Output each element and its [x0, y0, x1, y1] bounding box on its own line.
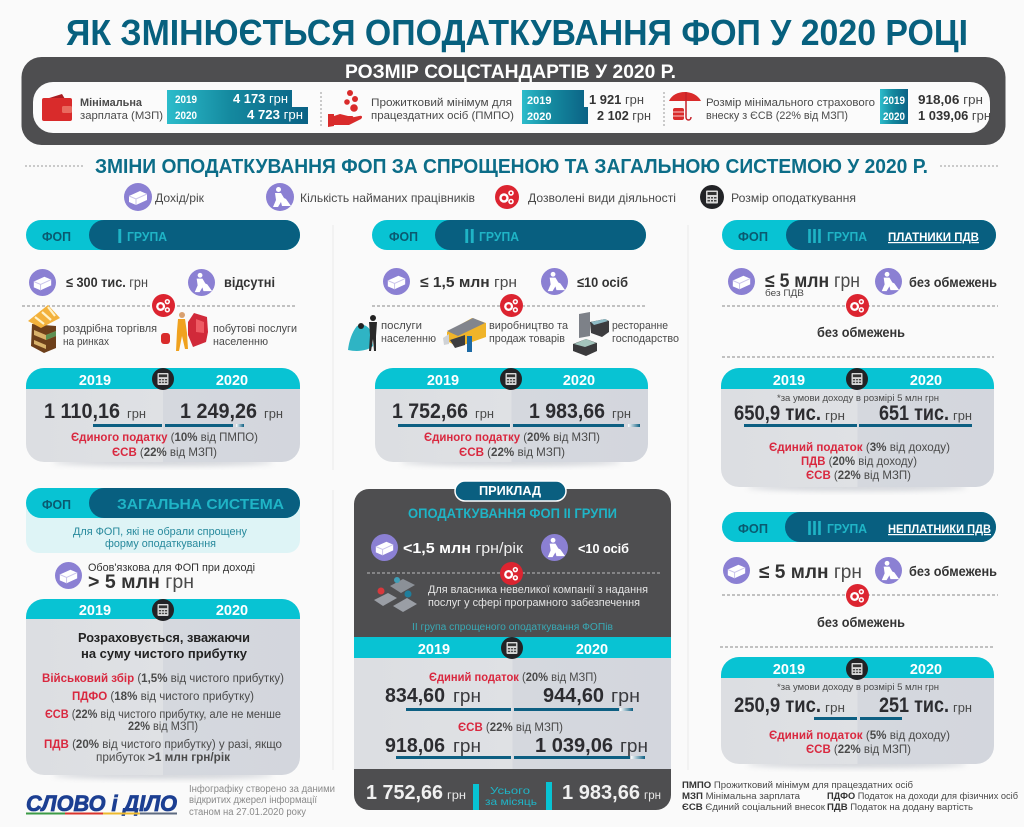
group II pill: ГРУПА	[479, 229, 520, 244]
general system pill	[26, 488, 300, 553]
source note	[189, 783, 335, 818]
source note: станом на 27.01.2020 року	[189, 807, 306, 818]
monthly total: грн	[644, 788, 661, 802]
income limit: ≤ 300 тис. грн	[66, 274, 148, 290]
tax panel: general system: 2020	[216, 603, 248, 619]
icon: activities	[500, 562, 523, 585]
income limit: ≤ 5 млн грн	[759, 562, 862, 583]
production text	[489, 320, 569, 345]
group III non-VAT payers pill: ФОП	[738, 521, 768, 536]
tax panel: general system: ПДФО (18% від чистого прибутку)	[72, 691, 254, 703]
icon: factory	[443, 318, 486, 352]
hairdresser text: населенню	[381, 333, 436, 345]
minimum wage label: зарплата (МЗП)	[80, 110, 163, 122]
icon: income	[124, 183, 152, 211]
tax panel: group III VAT payers: 650,9 тис.	[734, 402, 821, 425]
monthly total: за місяць	[485, 796, 538, 808]
insurance contribution label: Розмір мінімального страхового	[706, 97, 875, 109]
example description: послуг у сфері програмного забезпечення	[428, 597, 640, 609]
column: general system	[26, 488, 300, 779]
group III VAT payers pill: ГРУПА	[827, 229, 868, 244]
example tax body: грн	[453, 736, 481, 756]
tax panel: group III VAT payers: 651 тис.	[879, 402, 949, 425]
employees limit	[541, 534, 629, 561]
tax panel: group III VAT payers: 2019	[773, 373, 805, 389]
tax panel: general system: Військовий збір (1,5% від чистого прибутку)	[42, 673, 284, 685]
column: group II	[348, 220, 679, 466]
employees limit: ≤10 осіб	[577, 274, 628, 290]
general system description: Для ФОП, які не обрали спрощену	[73, 526, 247, 538]
example tax body: грн	[620, 736, 648, 756]
tax panel: group I: 1 249,26	[180, 400, 257, 423]
permitted activities text: без обмежень	[817, 615, 905, 630]
services text	[213, 323, 297, 348]
services text: побутові послуги	[213, 323, 297, 335]
hairdresser text	[381, 320, 436, 345]
tax panel: general system: ПДВ (20% від чистого прибутку) у разі, якщо	[44, 739, 282, 751]
tax panel: general system: ЄСВ (22% від чистого прибутку, але не менше	[45, 709, 281, 721]
tax panel: general system: 22% від МЗП)	[128, 721, 198, 733]
tax panel: group II: 1 752,66	[392, 400, 468, 423]
example tax body: 918,06	[385, 735, 445, 757]
tax panel: group III non-VAT payers: грн	[953, 700, 972, 715]
group II pill: ФОП	[389, 229, 418, 244]
icon: activities	[846, 294, 869, 317]
tax panel: group III non-VAT payers: ЄСВ (22% від МЗП)	[806, 742, 911, 756]
insurance contribution values: 1 039,06 грн	[918, 108, 991, 123]
icon: activities	[500, 294, 523, 317]
insurance contribution values	[880, 89, 991, 124]
tax panel: group III non-VAT payers: 2019	[773, 662, 805, 678]
logo: СЛОВО і ДІЛО	[26, 791, 177, 816]
tax panel: group III non-VAT payers	[721, 657, 994, 768]
example description	[428, 584, 648, 609]
example heading: ОПОДАТКУВАННЯ ФОП II ГРУПИ	[408, 506, 617, 521]
column: group III non-VAT payers	[720, 512, 998, 768]
tax panel: group I: 1 110,16	[44, 400, 120, 423]
subsistence minimum label: Прожитковий мінімум для	[371, 97, 512, 109]
tax panel: group III VAT payers	[721, 368, 994, 491]
general system pill: ФОП	[42, 497, 71, 512]
insurance contribution values: 918,06 грн	[918, 92, 983, 107]
example description: Для власника невеликої компанії з надання	[428, 584, 648, 596]
icon: permitted activities	[495, 185, 519, 209]
icon: coins in hand	[328, 90, 362, 127]
group III VAT payers pill: ПЛАТНИКИ ПДВ	[888, 230, 979, 244]
minimum wage values: 4 723 грн	[247, 107, 303, 122]
abbreviations legend	[682, 780, 1019, 813]
tax panel: group III VAT payers: ПДВ (20% від доходу)	[801, 454, 917, 468]
legend: Розмір оподаткування	[731, 191, 856, 205]
tax panel: general system: Розраховується, зважаючи	[78, 630, 250, 645]
insurance contribution values: 2019	[883, 95, 905, 107]
example tax body: 2019	[418, 642, 450, 658]
icon: activities	[152, 294, 175, 317]
restaurant text: господарство	[612, 333, 679, 345]
abbreviations legend: ПДФО Податок на доходи для фізичних осіб	[827, 791, 1019, 802]
example tax body: ЄСВ (22% від МЗП)	[458, 722, 563, 734]
group I pill: ГРУПА	[127, 229, 168, 244]
example tax body: Єдиний податок (20% від МЗП)	[429, 672, 597, 684]
group III non-VAT payers pill: НЕПЛАТНИКИ ПДВ	[888, 522, 991, 536]
group III non-VAT payers pill: III	[807, 518, 822, 540]
tax panel: group III non-VAT payers: Єдиний податок (5% від доходу)	[769, 728, 950, 742]
icon: workers	[266, 183, 294, 211]
tax panel: general system: на суму чистого прибутку	[81, 646, 248, 661]
group III non-VAT payers pill	[722, 512, 996, 542]
source note: Інфографіку створено за даними	[189, 783, 335, 795]
legend: Дозволені види діяльності	[528, 191, 676, 205]
tax panel: group I: 2020	[216, 373, 248, 389]
tax panel: group I	[26, 368, 300, 466]
column: group I	[22, 220, 300, 466]
group III VAT payers pill: III	[807, 226, 822, 248]
employees limit: відсутні	[224, 274, 275, 290]
tax panel: group III non-VAT payers: 250,9 тис.	[734, 694, 821, 717]
insurance contribution values: 2020	[883, 111, 905, 123]
tax panel: general system: прибуток >1 млн грн/рік	[96, 752, 230, 764]
mandatory income threshold: Обов'язкова для ФОП при доході	[88, 562, 255, 574]
general system description	[73, 526, 247, 550]
income limit: ≤ 1,5 млн грн	[420, 274, 517, 291]
minimum wage values: 2020	[175, 110, 197, 122]
abbreviations legend: МЗП Мінімальна зарплата	[682, 791, 801, 802]
retail text: роздрібна торгівля	[63, 323, 157, 335]
icon: restaurant kitchen	[573, 312, 609, 356]
income limit	[723, 557, 862, 584]
tax panel: group II: 2020	[563, 373, 595, 389]
group I pill: I	[117, 226, 123, 248]
example badge: ПРИКЛАД	[479, 483, 542, 498]
tax panel: group I: грн	[127, 406, 146, 421]
group I pill: ФОП	[42, 229, 71, 244]
abbreviations legend: ПМПО Прожитковий мінімум для працездатних осіб	[682, 780, 914, 791]
subsistence minimum values	[522, 90, 651, 124]
group I pill	[26, 220, 300, 250]
tax panel: group III non-VAT payers: 251 тис.	[879, 694, 949, 717]
subsistence minimum values: 2019	[527, 95, 551, 107]
example tax body: грн	[611, 686, 640, 706]
panel heading: РОЗМІР СОЦСТАНДАРТІВ У 2020 Р.	[345, 62, 676, 83]
tax panel: general system: 2019	[79, 603, 111, 619]
example subtitle: II група спрощеного оподаткування ФОПів	[412, 622, 613, 633]
minimum wage label	[80, 97, 163, 122]
group III VAT payers pill	[722, 220, 996, 250]
example badge	[455, 481, 566, 501]
panel: example	[354, 481, 671, 810]
insurance contribution label: внеску з ЄСВ (22% від МЗП)	[706, 110, 848, 122]
tax panel: group III VAT payers: грн	[953, 408, 972, 423]
tax panel: group III VAT payers: *за умови доходу в розмірі 5 млн грн	[777, 393, 939, 403]
tax panel: group III VAT payers: ЄСВ (22% від МЗП)	[806, 468, 911, 482]
restaurant text: ресторанне	[612, 320, 668, 332]
tax panel: group I: Єдиного податку (10% від ПМПО)	[71, 430, 258, 444]
group II pill	[372, 220, 646, 250]
general system description: форму оподаткування	[105, 538, 216, 550]
group III VAT payers pill: ФОП	[738, 229, 768, 244]
insurance contribution label	[706, 97, 875, 122]
example tax body: 944,60	[543, 685, 604, 707]
employees limit	[541, 268, 628, 295]
monthly total: грн	[447, 788, 466, 802]
tax panel: group III non-VAT payers: 2020	[910, 662, 942, 678]
employees limit	[875, 268, 997, 295]
employees limit: <10 осіб	[578, 541, 629, 556]
tax panel: group II: 2019	[427, 373, 459, 389]
tax panel: group III VAT payers: Єдиний податок (3% від доходу)	[769, 440, 950, 454]
tax panel: general system	[26, 599, 300, 779]
tax panel: group III non-VAT payers: грн	[825, 700, 845, 715]
monthly total: 1 983,66	[562, 782, 640, 804]
tax panel: group II: Єдиного податку (20% від МЗП)	[424, 430, 600, 444]
icon: tax amount	[700, 185, 724, 209]
group III non-VAT payers pill: ГРУПА	[827, 521, 868, 536]
icon: wallet	[42, 94, 72, 121]
retail text	[63, 323, 157, 348]
column: group III VAT payers	[721, 220, 998, 491]
income limit: <1,5 млн грн/рік	[403, 540, 523, 557]
tax panel: group I: 2019	[79, 373, 111, 389]
icon: hairdresser	[348, 315, 377, 351]
title: ЯК ЗМІНЮЄТЬСЯ ОПОДАТКУВАННЯ ФОП У 2020 РОЦІ	[66, 12, 968, 53]
income limit	[728, 268, 860, 299]
example tax body: грн	[453, 686, 481, 706]
income limit: ≤ 5 млн грн	[765, 271, 860, 292]
hairdresser text: послуги	[381, 320, 422, 332]
legend: Дохід/рік	[155, 191, 205, 205]
production text: виробництво та	[489, 320, 569, 332]
subsistence minimum label	[371, 97, 514, 122]
icon: activities	[846, 584, 869, 607]
subsistence minimum values: 1 921 грн	[589, 92, 644, 107]
legend	[124, 183, 856, 211]
mandatory income threshold: > 5 млн грн	[88, 572, 194, 593]
icon: market stall	[28, 305, 60, 353]
tax panel: group III VAT payers: 2020	[910, 373, 942, 389]
tax panel: group II: грн	[475, 406, 494, 421]
subsistence minimum values: 2020	[527, 111, 551, 123]
icon: repair worker and armchair	[161, 312, 208, 351]
minimum wage label: Мінімальна	[80, 97, 143, 109]
mandatory income threshold	[55, 562, 255, 593]
monthly total: Усього	[490, 785, 530, 797]
tax panel: group II: грн	[612, 406, 631, 421]
permitted activities text: без обмежень	[817, 325, 905, 340]
icon: umbrella and coins	[669, 92, 701, 120]
production text: продаж товарів	[489, 333, 565, 345]
retail text: на ринках	[63, 336, 109, 348]
employees limit: без обмежень	[909, 564, 997, 579]
tax panel: group III non-VAT payers: *за умови доходу в розмірі 5 млн грн	[777, 682, 939, 692]
income limit	[29, 269, 148, 296]
example tax body	[354, 637, 671, 769]
tax panel: group III VAT payers: грн	[825, 408, 845, 423]
tax panel: group II: 1 983,66	[529, 400, 605, 423]
employees limit	[875, 557, 997, 584]
abbreviations legend: ПДВ Податок на додану вартість	[827, 802, 973, 813]
subsistence minimum values: 2 102 грн	[597, 108, 651, 123]
example tax body: 1 039,06	[535, 735, 613, 757]
tax panel: group II	[375, 368, 648, 466]
tax panel: group I: ЄСВ (22% від МЗП)	[112, 445, 217, 459]
income limit: без ПДВ	[765, 288, 804, 299]
general system pill: ЗАГАЛЬНА СИСТЕМА	[117, 496, 284, 513]
employees limit: без обмежень	[909, 275, 997, 290]
minimum wage values: 2019	[175, 94, 197, 106]
tax panel: group II: ЄСВ (22% від МЗП)	[459, 445, 565, 459]
restaurant text	[612, 320, 679, 345]
minimum wage values	[167, 90, 308, 124]
legend: Кількість найманих працівників	[300, 191, 475, 205]
section heading: ЗМІНИ ОПОДАТКУВАННЯ ФОП ЗА СПРОЩЕНОЮ ТА ЗАГАЛЬНОЮ СИСТЕМОЮ У 2020 Р.	[95, 156, 928, 178]
source note: відкритих джерел інформації	[189, 794, 317, 806]
group II pill: II	[464, 226, 475, 248]
monthly total: 1 752,66	[366, 782, 443, 804]
income limit	[371, 534, 523, 561]
example tax body: 834,60	[385, 685, 445, 707]
monthly total	[366, 782, 661, 810]
abbreviations legend: ЄСВ Єдиний соціальний внесок	[682, 802, 826, 813]
income limit	[383, 268, 517, 295]
employees limit	[188, 269, 275, 296]
icon: office workers	[374, 577, 417, 612]
panel: social standards	[22, 57, 1006, 145]
services text: населенню	[213, 336, 268, 348]
minimum wage values: 4 173 грн	[233, 91, 288, 106]
example tax body: 2020	[576, 642, 608, 658]
tax panel: group I: грн	[264, 406, 283, 421]
subsistence minimum label: працездатних осіб (ПМПО)	[371, 110, 514, 122]
